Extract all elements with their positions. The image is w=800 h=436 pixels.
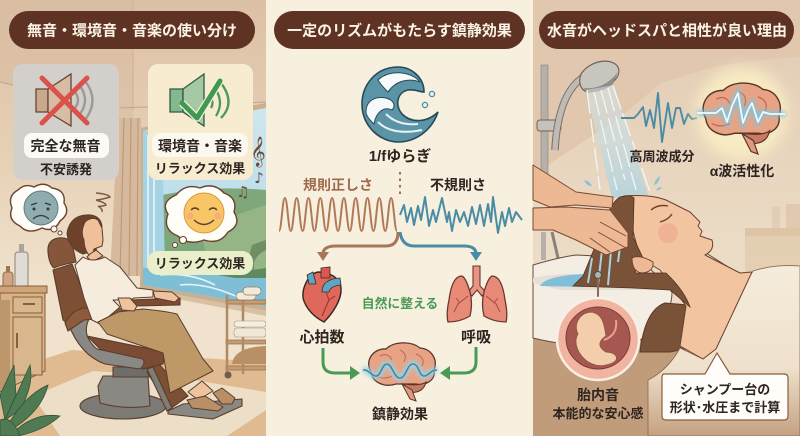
towel cart (224, 287, 266, 378)
label: alpha wave activation: α波活性化 (710, 163, 774, 179)
panel: right, water sound and head spa (533, 0, 800, 436)
chair (48, 238, 242, 419)
callout (662, 353, 788, 420)
arrow to heart (317, 232, 398, 261)
label: breathing: 呼吸 (461, 329, 491, 346)
heading: right: 水音がヘッドスパと相性が良い理由 (547, 22, 787, 40)
thought bubble: worried (10, 184, 67, 235)
music notes (236, 136, 266, 201)
towel (648, 266, 800, 436)
floor (0, 350, 266, 436)
irregular wave (400, 197, 522, 233)
rug (33, 371, 266, 436)
panel: center, rhythm and calming (266, 0, 533, 436)
card: complete silence: 不安誘発 (40, 162, 92, 177)
label: relax effect (147, 251, 253, 275)
label: irregularity: 不規則さ (430, 177, 486, 193)
music notes: ♫ (236, 183, 250, 201)
arrow to lungs (400, 232, 482, 261)
card: ambient sound and music: リラックス効果 (155, 161, 245, 176)
heading: right (539, 11, 794, 49)
divider dots (399, 172, 401, 197)
icon: brain with wave (363, 343, 437, 401)
icon: muted speaker (36, 74, 92, 126)
icon: heart (303, 267, 341, 322)
label: calming effect: 鎮静効果 (372, 406, 428, 422)
plant foreground (0, 365, 60, 436)
cabinet and bottles (745, 198, 800, 274)
icon: speaker with check (170, 74, 228, 126)
callout: シャンプー台の (680, 382, 770, 397)
basin (533, 253, 733, 346)
icon: lungs (447, 266, 507, 322)
hands massaging (533, 165, 628, 255)
heading: center (274, 11, 525, 49)
water spray (584, 85, 662, 198)
card: complete silence (13, 64, 119, 180)
label: high-frequency component: 高周波成分 (629, 149, 695, 164)
cabinet with bottles (0, 244, 47, 392)
curtain (110, 118, 141, 276)
high-frequency wave (621, 93, 697, 142)
label: relax effect: リラックス効果 (155, 256, 245, 271)
card: ambient sound and music (148, 64, 253, 180)
arrow: heart to brain (323, 348, 360, 380)
music notes: 𝄞 (250, 136, 266, 168)
face and neck (624, 196, 752, 359)
label: fetal sound: 胎内音 (577, 387, 619, 403)
icon: brain with alpha waves (696, 67, 788, 159)
icon: dizzy swirl (96, 193, 110, 212)
heading: center: 一定のリズムがもたらす鎮静効果 (287, 22, 512, 40)
icon: wave (362, 67, 438, 142)
heading: left (9, 11, 255, 49)
callout: 形状･水圧まで計算 (670, 400, 780, 415)
window with waterfall (140, 103, 266, 316)
label: naturally regulated: 自然に整える (362, 296, 438, 311)
label: heart rate: 心拍数 (299, 328, 345, 346)
regular sine wave (279, 198, 397, 231)
fetus inset (557, 272, 639, 380)
card: ambient sound and music: 環境音・音楽 (158, 138, 242, 154)
arrow: breathing to brain (440, 347, 476, 380)
music notes: ♪ (254, 169, 264, 187)
headrest (640, 303, 690, 352)
label: instinctive reassurance: 本能的な安心感 (552, 406, 644, 421)
label: regularity: 規則正しさ (303, 177, 373, 193)
shower (537, 61, 619, 260)
plant by window (250, 240, 266, 283)
thought bubble: happy (165, 186, 237, 248)
woman resting (67, 215, 235, 411)
hair (573, 196, 690, 307)
panel: left, silence vs ambient sound (0, 0, 267, 436)
floor band (533, 335, 800, 436)
label: 1/f fluctuation: 1/fゆらぎ (369, 147, 431, 165)
heading: left: 無音・環境音・音楽の使い分け (27, 22, 237, 40)
card: complete silence: 完全な無音 (30, 138, 100, 154)
